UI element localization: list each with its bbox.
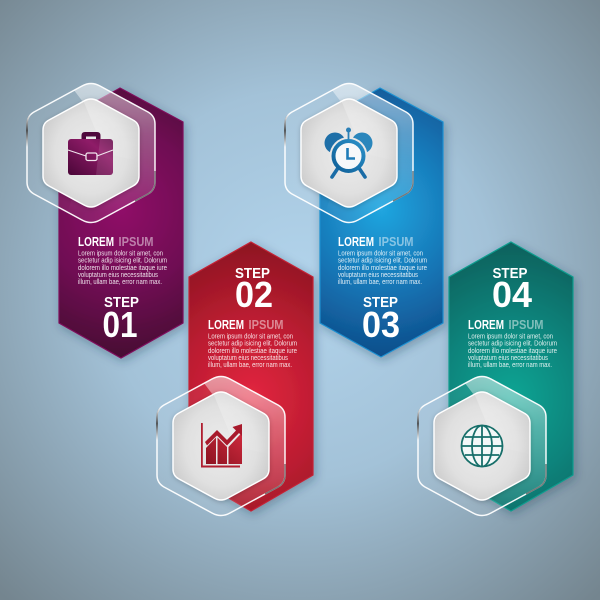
text block 1: dolorem illo molestiae itaque iure: [78, 265, 167, 272]
panel: step 03: [320, 88, 443, 357]
text block 3: sectetur adip isicing elit. Dolorum: [338, 258, 427, 265]
step label 04: 04: [492, 274, 532, 315]
heading: lorem ipsum 1: [78, 234, 154, 249]
text block 2: illum, ullam bae, error nam max.: [208, 362, 292, 369]
text block 3: voluptatum eius necessitatibus: [338, 272, 418, 279]
text block 1: illum, ullam bae, error nam max.: [78, 279, 162, 286]
heading: lorem ipsum 2: IPSUM: [248, 317, 284, 332]
panel: step 01: [59, 88, 183, 358]
heading: lorem ipsum 4: IPSUM: [508, 317, 544, 332]
glass hexagon badge 2: [157, 374, 287, 516]
text block 4: sectetur adip isicing elit. Dolorum: [468, 341, 557, 348]
step label 02: 02: [235, 274, 273, 315]
text block 4: dolorem illo molestiae itaque iure: [468, 348, 557, 355]
heading: lorem ipsum 1: IPSUM: [118, 234, 154, 249]
text block 1: [78, 250, 167, 286]
heading: lorem ipsum 3: [338, 234, 414, 249]
panel: step 04: [449, 242, 573, 511]
text block 2: sectetur adip isicing elit. Dolorum: [208, 341, 297, 348]
icon: briefcase: [68, 132, 113, 175]
heading: lorem ipsum 2: LOREM: [208, 317, 244, 332]
step label 01: STEP: [104, 294, 139, 311]
text block 4: [468, 334, 557, 369]
text block 4: Lorem ipsum dolor sit amet, con: [468, 334, 553, 340]
text block 1: sectetur adip isicing elit. Dolorum: [78, 258, 167, 265]
text block 2: Lorem ipsum dolor sit amet, con: [208, 334, 293, 340]
text block 2: [208, 334, 297, 369]
text block 3: [338, 250, 427, 286]
text block 3: Lorem ipsum dolor sit amet, con: [338, 250, 423, 258]
heading: lorem ipsum 3: LOREM: [338, 234, 374, 249]
glass hexagon badge 3: [285, 81, 415, 222]
text block 4: voluptatum eius necessitatibus: [468, 355, 548, 362]
step label 03: STEP: [363, 294, 398, 311]
heading: lorem ipsum 2: [208, 317, 284, 332]
icon: growth chart: [201, 423, 242, 468]
heading: lorem ipsum 4: [468, 317, 544, 332]
step label 04: STEP: [492, 265, 528, 282]
step label 02: STEP: [235, 265, 270, 282]
text block 1: voluptatum eius necessitatibus: [78, 272, 158, 279]
heading: lorem ipsum 3: IPSUM: [378, 234, 414, 249]
text block 1: Lorem ipsum dolor sit amet, con: [78, 250, 163, 258]
text block 2: dolorem illo molestiae itaque iure: [208, 348, 297, 355]
heading: lorem ipsum 4: LOREM: [468, 317, 504, 332]
text block 4: illum, ullam bae, error nam max.: [468, 362, 552, 369]
text block 3: illum, ullam bae, error nam max.: [338, 279, 422, 286]
text block 3: dolorem illo molestiae itaque iure: [338, 265, 427, 272]
step label 03: 03: [362, 304, 400, 345]
glass hexagon badge 4: [418, 374, 548, 516]
glass hexagon badge 1: [27, 81, 157, 222]
panel: step 02: [189, 242, 313, 511]
icon: alarm clock: [324, 128, 372, 177]
heading: lorem ipsum 1: LOREM: [78, 234, 114, 249]
icon: globe: [462, 426, 502, 466]
step label 01: 01: [102, 304, 138, 345]
text block 2: voluptatum eius necessitatibus: [208, 355, 288, 362]
